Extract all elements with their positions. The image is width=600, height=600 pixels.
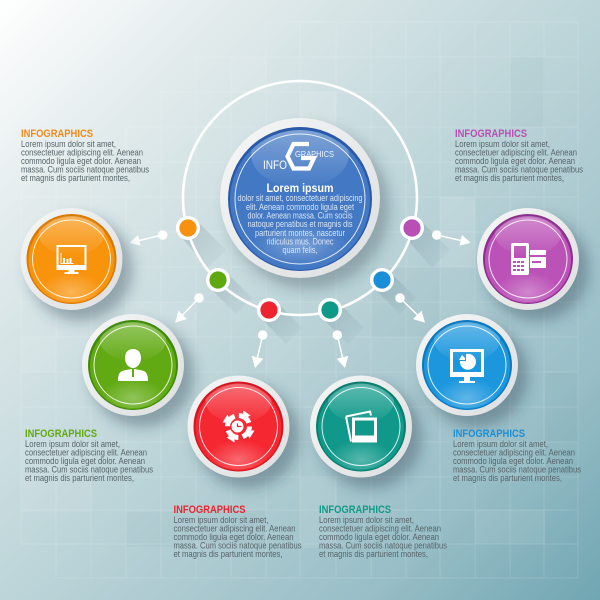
text block: red: consectetuer adipiscing elit. Aenean (174, 524, 296, 534)
text block: blue (453, 428, 581, 484)
text block: teal: consectetuer adipiscing elit. Aenean (319, 524, 441, 534)
text block: purple: INFOGRAPHICS (455, 128, 527, 140)
icon: monitor with pie chart (450, 349, 484, 383)
text block: red (174, 504, 302, 560)
arrows (130, 231, 471, 368)
large ring (183, 81, 417, 315)
center text block: natoque penatibus et magnis dis (248, 219, 353, 230)
panel: purple circle (477, 208, 589, 321)
text block: blue: INFOGRAPHICS (453, 428, 525, 440)
panel: orange circle (20, 208, 132, 321)
text block: green: massa. Cum sociis natoque penatibus (25, 464, 153, 476)
panel: red circle (188, 376, 300, 488)
text block: blue: commodo ligula eget dolor. Aenean (453, 456, 573, 467)
icon: monitor with bar chart (56, 245, 86, 274)
text block: purple: Lorem ipsum dolor sit amet, (455, 139, 550, 150)
icon: phone and card (511, 243, 546, 275)
text block: green: et magnis dis parturient montes, (25, 473, 134, 484)
ring nodes (178, 218, 422, 320)
text block: orange: commodo ligula eget dolor. Aenean (21, 156, 141, 167)
icon: person (118, 349, 148, 381)
text block: red: et magnis dis parturient montes, (174, 549, 282, 560)
text block: teal: commodo ligula eget dolor. Aenean (319, 532, 439, 543)
center text block: Lorem ipsum (266, 181, 334, 195)
text block: orange: consectetuer adipiscing elit. Aenean (21, 148, 143, 158)
text block: orange: Lorem ipsum dolor sit amet, (21, 139, 116, 150)
text block: blue: et magnis dis parturient montes, (453, 473, 562, 484)
icon: photos (346, 412, 377, 442)
text block: orange: massa. Cum sociis natoque penatibus (21, 164, 149, 176)
text block: teal: INFOGRAPHICS (319, 504, 391, 516)
text block: purple: et magnis dis parturient montes, (455, 173, 564, 184)
long shadows (180, 220, 450, 344)
center logo: GRAPHICS (295, 149, 334, 159)
text block: red: INFOGRAPHICS (174, 504, 246, 516)
text block: orange: INFOGRAPHICS (21, 128, 93, 140)
text block: orange (21, 128, 149, 184)
text block: teal: et magnis dis parturient montes, (319, 549, 428, 560)
panel: blue circle (416, 314, 528, 427)
text block: red: Lorem ipsum dolor sit amet, (174, 515, 268, 526)
text block: purple (455, 128, 583, 184)
text block: green: consectetuer adipiscing elit. Aenean (25, 448, 147, 458)
panel: teal circle (310, 376, 422, 488)
center logo: INFO (263, 160, 287, 172)
text block: teal: Lorem ipsum dolor sit amet, (319, 515, 414, 526)
text block: green (25, 428, 153, 484)
text block: green: INFOGRAPHICS (25, 428, 97, 440)
text block: orange: et magnis dis parturient montes, (21, 173, 130, 184)
text block: teal: massa. Cum sociis natoque penatibus (319, 540, 447, 552)
center text block (238, 181, 362, 256)
center logo (263, 144, 334, 172)
center text block: quam felis, (282, 245, 318, 256)
panel: center circle (220, 118, 390, 289)
center text block: dolor sit amet, consectetuer adipiscing (238, 193, 362, 204)
center text block: elit. Aenean commodo ligula eget (246, 202, 354, 213)
center text block: ridiculus mus. Donec (266, 236, 334, 248)
panel: green circle (82, 314, 194, 427)
center text block: dolor. Aenean massa. Cum sociis (248, 210, 353, 222)
text block: blue: Lorem ipsum dolor sit amet, (453, 439, 548, 450)
icon: circular arrows (222, 410, 254, 442)
text block: red: commodo ligula eget dolor. Aenean (174, 532, 294, 543)
text block: green: commodo ligula eget dolor. Aenean (25, 456, 145, 467)
text block: red: massa. Cum sociis natoque penatibus (174, 540, 302, 552)
center text block: parturient montes, nascetur (255, 228, 346, 239)
text block: green: Lorem ipsum dolor sit amet, (25, 439, 120, 450)
text block: teal (319, 504, 447, 560)
